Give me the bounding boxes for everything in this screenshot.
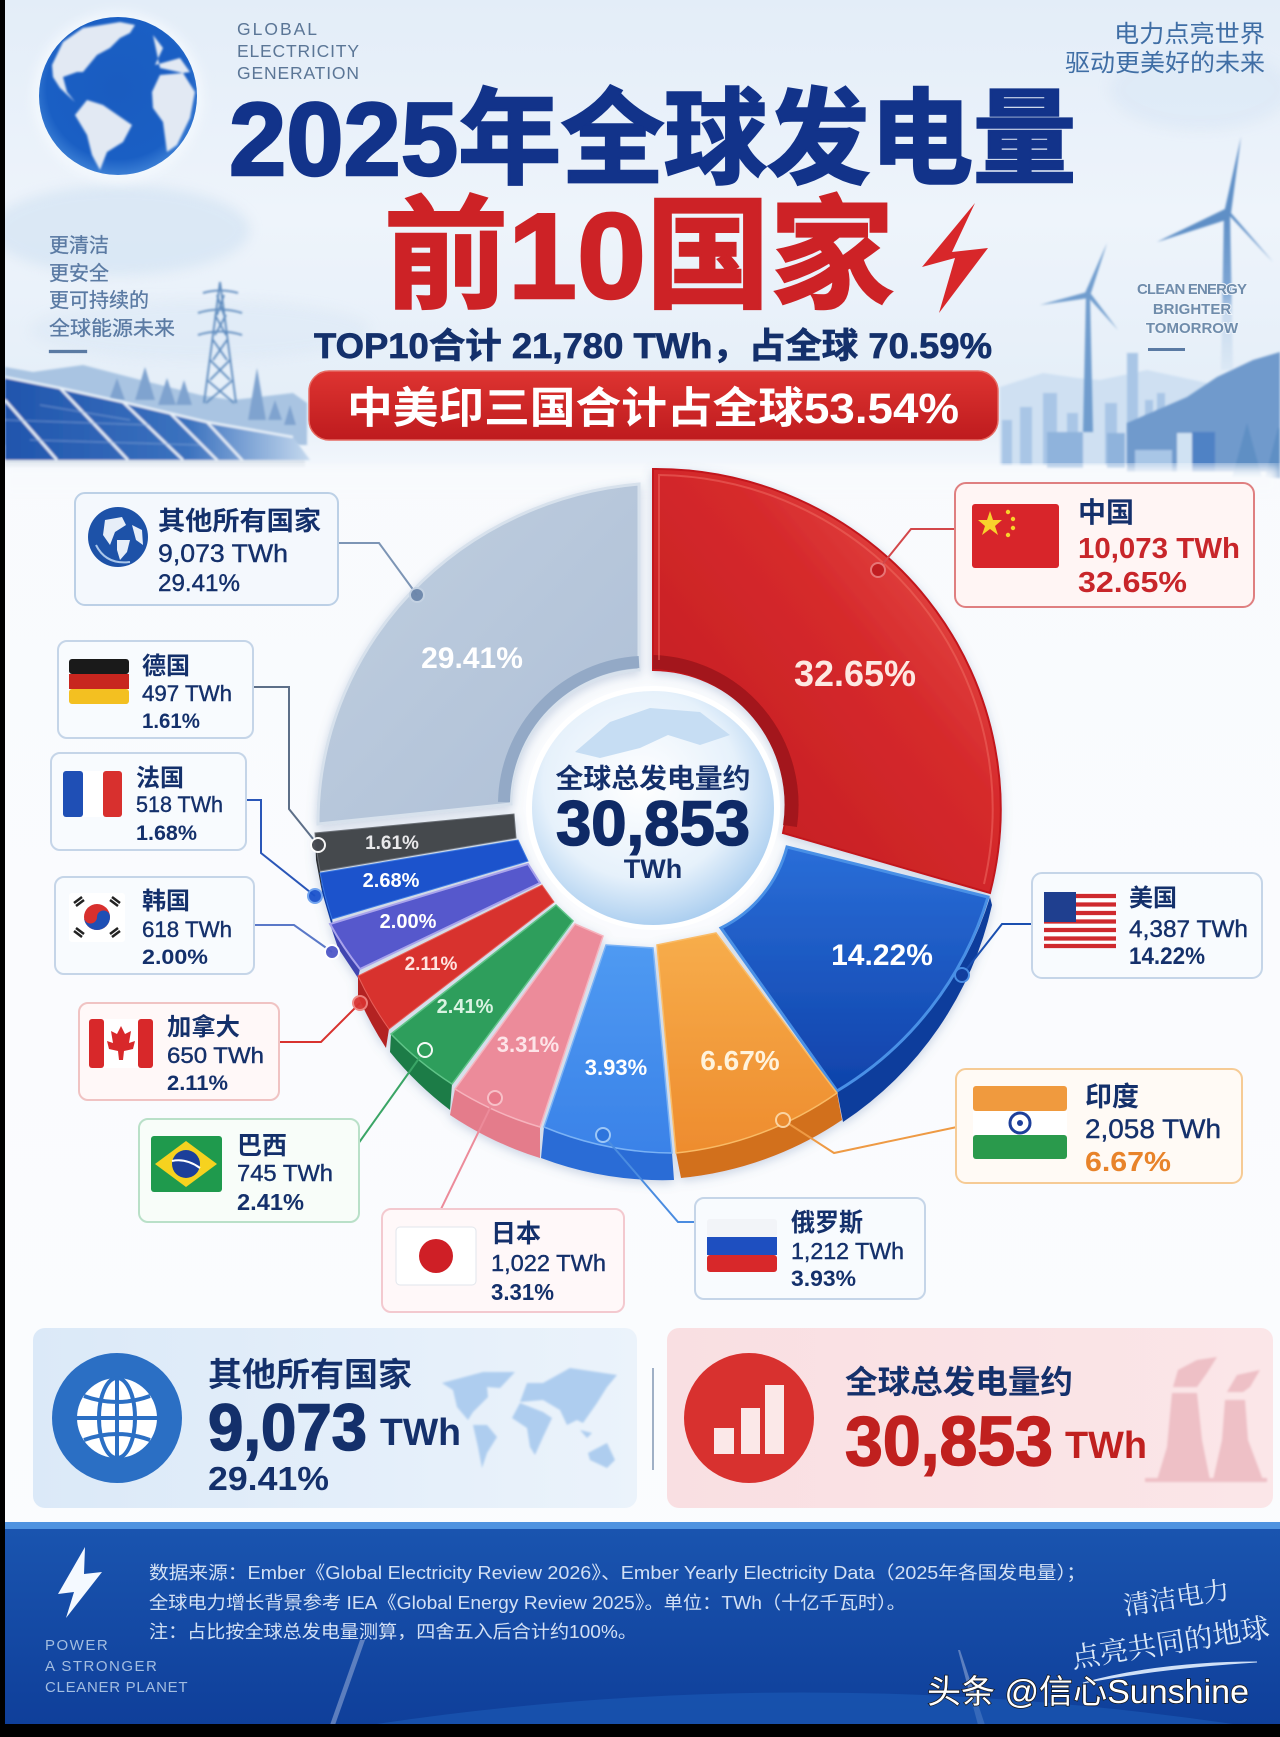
callout: india: 2,058 TWh	[1085, 1114, 1221, 1144]
footer power slogan	[45, 1637, 189, 1696]
red pill callout: 中美印三国合计占全球53.54%	[347, 385, 959, 433]
label: global electricity generation: ELECTRICITY	[237, 41, 359, 61]
flag: brazil	[151, 1136, 222, 1192]
connector dots	[308, 563, 969, 1142]
callout: canada	[79, 1003, 279, 1100]
callout: china	[955, 483, 1254, 607]
wedge: other countries	[318, 484, 639, 824]
callout: usa: 美国	[1129, 885, 1177, 912]
wedge percent labels: 6.67%	[700, 1045, 780, 1076]
panel: global total summary: 全球总发电量约	[845, 1364, 1073, 1400]
callout: japan: 1,022 TWh	[491, 1250, 606, 1276]
wedge: germany	[315, 814, 516, 871]
callout: china: 10,073 TWh	[1078, 533, 1240, 565]
flag: usa	[1044, 892, 1116, 948]
callout: india	[956, 1069, 1242, 1183]
handwritten slogan	[1069, 1576, 1272, 1683]
connector lines	[246, 529, 1032, 1222]
title line two: 前10国家	[384, 188, 894, 324]
callout: korea: 2.00%	[142, 946, 208, 969]
panel: global total summary	[667, 1328, 1273, 1508]
wedge percent labels: 32.65%	[794, 653, 916, 694]
callout: other countries	[75, 493, 338, 605]
callout: other countries: 29.41%	[158, 570, 240, 597]
callout: india: 印度	[1085, 1082, 1139, 1112]
right slogan: TOMORROW	[1146, 320, 1239, 337]
left slogan: 更可持续的	[49, 289, 149, 312]
center hub	[526, 686, 780, 930]
callout: germany	[58, 641, 253, 738]
handwritten slogan: 点亮共同的地球	[1069, 1612, 1272, 1675]
left slogan: 更安全	[49, 262, 109, 285]
header background scene	[0, 0, 1280, 496]
callout: france: 518 TWh	[136, 792, 223, 817]
footer power slogan: CLEANER PLANET	[45, 1679, 189, 1696]
wedge percent labels: 1.61%	[365, 833, 419, 854]
panel: other countries summary: 其他所有国家	[208, 1356, 412, 1393]
transmission tower	[198, 282, 242, 403]
distant mountains right	[1000, 370, 1207, 465]
center total: 30,853	[556, 789, 750, 859]
handwritten slogan: 清洁电力	[1121, 1576, 1232, 1621]
callout: brazil: 巴西	[237, 1132, 287, 1160]
panel: global total summary: TWh	[1065, 1425, 1147, 1467]
icon: small globe	[88, 507, 148, 567]
wedge percent labels: 2.11%	[405, 954, 458, 975]
flag: japan	[396, 1227, 476, 1285]
watermark: 头条 @信心Sunshine	[927, 1673, 1249, 1710]
callout: russia: 1,212 TWh	[791, 1238, 904, 1264]
label: global electricity generation: GENERATION	[237, 63, 359, 83]
flag: germany	[69, 659, 129, 704]
wedge: canada	[358, 885, 554, 1029]
wind turbine small	[1040, 243, 1118, 432]
wedge: india	[657, 933, 837, 1153]
callout: usa	[1032, 873, 1262, 978]
left slogan: 更清洁	[49, 234, 109, 257]
wedge: japan	[455, 924, 603, 1127]
data source note: 数据来源：Ember《Global Electricity Review 2026》、Ember Yearly Electricity Data（2025年各国发电量）；	[149, 1563, 1086, 1583]
panel: other countries summary: 29.41%	[208, 1460, 329, 1497]
inner shading	[653, 662, 792, 826]
label: global electricity generation: GLOBAL	[237, 19, 319, 39]
callout: germany: 德国	[142, 653, 190, 680]
callout: brazil	[139, 1119, 359, 1222]
callout: brazil: 745 TWh	[237, 1160, 333, 1186]
flag: canada	[89, 1019, 153, 1068]
city skyline	[1002, 353, 1165, 465]
callout: japan: 3.31%	[491, 1279, 554, 1305]
callout: india: 6.67%	[1085, 1146, 1171, 1177]
solar panels	[5, 377, 310, 467]
icon: red lightning bolt	[922, 203, 988, 313]
label: global electricity generation	[237, 19, 359, 83]
flag: india	[973, 1086, 1067, 1159]
callout: usa: 14.22%	[1129, 943, 1205, 970]
wind turbine large	[1157, 137, 1273, 370]
callout: other countries: 其他所有国家	[158, 506, 321, 536]
tagline top right: 电力点亮世界	[1114, 21, 1265, 48]
callout: russia	[695, 1198, 925, 1299]
wedge: usa	[721, 847, 988, 1091]
icon: globe	[33, 12, 203, 182]
tagline top right: 驱动更美好的未来	[1065, 50, 1265, 77]
donut chart	[315, 469, 1001, 1180]
callout: usa: 4,387 TWh	[1129, 916, 1248, 943]
left slogan: 全球能源未来	[49, 317, 175, 340]
wedge: brazil	[391, 905, 573, 1084]
callout: china: 32.65%	[1078, 567, 1187, 599]
icon: white lightning bolt	[58, 1547, 102, 1618]
left slogan	[49, 234, 175, 353]
callout: korea: 韩国	[142, 888, 190, 915]
callout: germany: 497 TWh	[142, 681, 232, 706]
flag: russia	[707, 1219, 777, 1272]
wedge sides	[315, 833, 992, 1180]
wedge percent labels: 3.31%	[497, 1032, 559, 1057]
callout: canada: 加拿大	[167, 1013, 240, 1041]
flag: france	[63, 771, 122, 817]
callout: other countries: 9,073 TWh	[158, 540, 288, 568]
callout: russia: 3.93%	[791, 1266, 856, 1291]
wedge: russia	[544, 945, 672, 1153]
panel: other countries summary	[33, 1328, 637, 1508]
wedge: china	[653, 469, 1001, 893]
wedge: france	[320, 840, 528, 919]
dark mountain right	[1127, 352, 1280, 478]
callout: japan	[382, 1209, 624, 1312]
footer band	[0, 1522, 1280, 1725]
callout: russia: 俄罗斯	[791, 1209, 863, 1237]
data source note	[149, 1563, 1086, 1642]
callout: france: 法国	[136, 765, 184, 792]
data source note: 全球电力增长背景参考 IEA《Global Energy Review 2025》。单位：TWh（十亿千瓦时）。	[149, 1593, 906, 1613]
world map watermark	[442, 1368, 617, 1468]
red pill callout	[309, 371, 998, 440]
panel: other countries summary: TWh	[380, 1412, 461, 1454]
wedge percent labels: 3.93%	[585, 1055, 647, 1080]
red bevel highlight	[659, 475, 993, 884]
icon: bar chart	[684, 1353, 814, 1483]
cooling towers watermark	[1145, 1357, 1267, 1482]
callout: japan: 日本	[491, 1220, 541, 1248]
right slogan: CLEAN ENERGY	[1137, 281, 1247, 298]
wedge percent labels: 2.41%	[437, 996, 494, 1018]
callout: china: 中国	[1078, 497, 1134, 528]
center label: 全球总发电量约	[556, 764, 750, 794]
data source note: 注：占比按全球总发电量测算，四舍五入后合计约100%。	[149, 1622, 637, 1642]
callout: canada: 2.11%	[167, 1072, 228, 1095]
wedge percent labels: 2.00%	[380, 911, 437, 933]
panel: other countries summary: 9,073	[208, 1390, 367, 1464]
center unit: TWh	[624, 854, 682, 884]
flag: korea	[69, 893, 125, 942]
footer power slogan: A STRONGER	[45, 1658, 158, 1675]
wedge percent labels	[363, 642, 933, 1080]
callout: korea	[55, 877, 254, 974]
subtitle: TOP10合计 21,780 TWh，占全球 70.59%	[314, 327, 992, 366]
callout: korea: 618 TWh	[142, 917, 232, 942]
tagline top right	[1065, 21, 1265, 77]
footer power slogan: POWER	[45, 1637, 109, 1654]
callout: canada: 650 TWh	[167, 1043, 264, 1068]
title line one: 2025年全球发电量	[229, 82, 1076, 198]
callout: germany: 1.61%	[142, 710, 200, 733]
callout: brazil: 2.41%	[237, 1189, 304, 1215]
wedge percent labels: 2.68%	[363, 870, 420, 892]
panel: global total summary: 30,853	[845, 1402, 1053, 1480]
wedge percent labels: 14.22%	[831, 939, 933, 972]
wedge percent labels: 29.41%	[421, 642, 523, 675]
callout: france: 1.68%	[136, 822, 197, 845]
right slogan	[1137, 281, 1247, 351]
right slogan: BRIGHTER	[1153, 301, 1231, 318]
wedge: korea	[330, 864, 540, 969]
callout: france	[51, 753, 246, 850]
flag: china	[972, 504, 1059, 568]
icon: white globe	[52, 1353, 182, 1483]
